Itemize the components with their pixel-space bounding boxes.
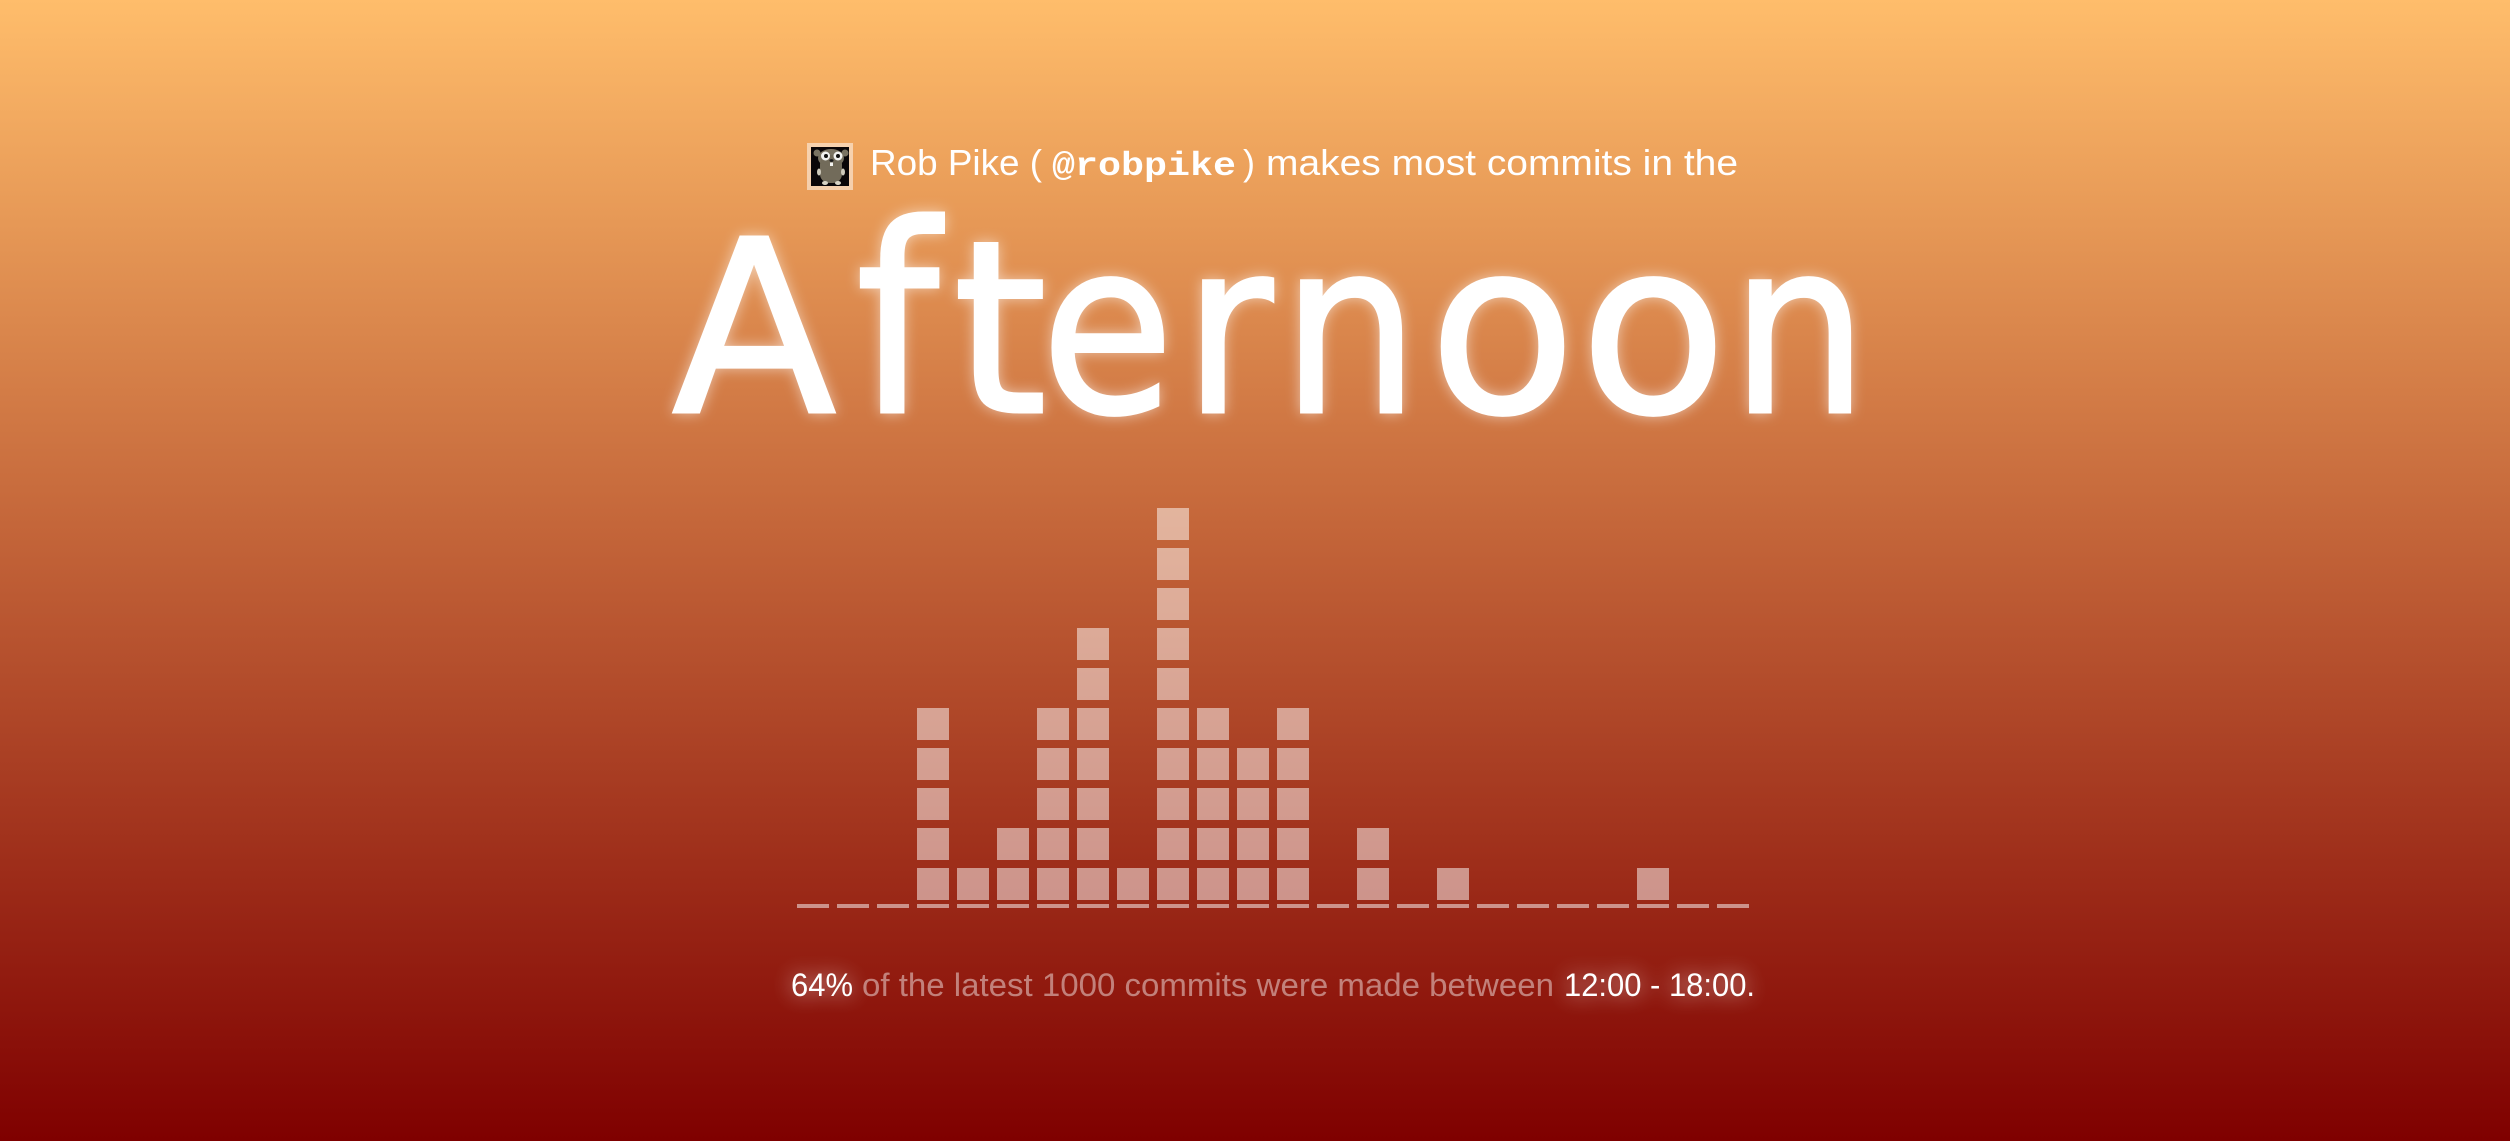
icon: gopher avatar: [807, 143, 853, 190]
baseline dashes: [797, 904, 1749, 908]
title: Afternoon: f: [856, 169, 946, 474]
column: 10 blocks: [1157, 508, 1189, 900]
headline text: closing parenthesis: ): [1243, 142, 1255, 183]
column: 7 blocks: [1077, 628, 1109, 900]
title: Afternoon: A: [672, 189, 836, 469]
headline text: Rob Pike: Rob Pike (: [870, 142, 1042, 183]
summary text: of the latest 1000 commits were made between: [862, 967, 1554, 1003]
column: 1 block: [957, 868, 989, 900]
column: 5 blocks: [1277, 708, 1309, 900]
column: 2 blocks: [1357, 828, 1389, 900]
column: 5 blocks: [917, 708, 949, 900]
time range: 12:00 - 18:00.: [1564, 967, 1755, 1003]
title: Afternoon: t: [953, 189, 1047, 469]
title: Afternoon: r: [1184, 189, 1273, 469]
column: 5 blocks: [1197, 708, 1229, 900]
title: Afternoon: n: [1731, 189, 1868, 469]
column: 2 blocks: [997, 828, 1029, 900]
column: 1 block: [1637, 868, 1669, 900]
title: Afternoon: o: [1580, 189, 1727, 469]
headline row: [807, 142, 1738, 190]
headline text: makes most commits: makes most commits in the: [1266, 142, 1738, 183]
column: 5 blocks: [1037, 708, 1069, 900]
column: 1 block: [1117, 868, 1149, 900]
title: Afternoon: e: [1041, 189, 1174, 469]
title: Afternoon: o: [1429, 189, 1576, 469]
summary sentence: [791, 967, 1755, 1003]
column: 1 block: [1437, 868, 1469, 900]
column: 4 blocks: [1237, 748, 1269, 900]
stat: 64%: 64%: [791, 967, 853, 1003]
headline text: username: @robpike: [1052, 148, 1236, 185]
bar chart: commits per hour: [797, 508, 1749, 908]
title: Afternoon: n: [1282, 189, 1419, 469]
